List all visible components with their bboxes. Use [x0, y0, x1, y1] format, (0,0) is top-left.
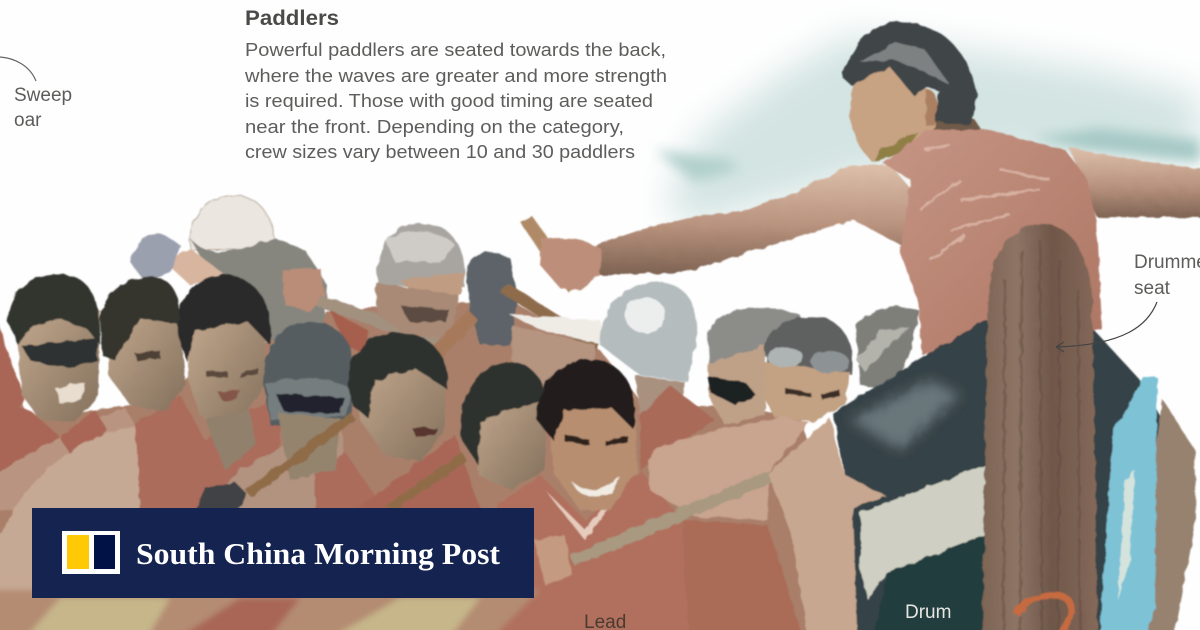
paddler with black cap	[264, 322, 353, 480]
drummer seat post	[982, 224, 1098, 630]
drumstick	[520, 216, 582, 292]
paddler with dark glasses	[707, 307, 800, 425]
white cap paddler behind	[510, 315, 605, 395]
back row of paddlers	[130, 195, 920, 470]
seat post grain	[1003, 240, 1080, 630]
oar shaft 2	[385, 452, 468, 510]
drummer left arm pointing	[590, 165, 912, 275]
drummer vest highlights	[920, 145, 1050, 260]
rust vest shoulders	[640, 385, 715, 470]
text block: paddlers description	[244, 39, 667, 162]
lead paddler with oar	[480, 360, 810, 630]
text block: paddlers description: where the waves are greater and more strength	[244, 65, 667, 86]
drummer fist	[540, 238, 602, 290]
label: drummer seat: seat	[1134, 278, 1171, 299]
drummer	[520, 22, 1200, 630]
label: sweep oar: Sweep	[14, 85, 72, 106]
label: drum: Drum	[905, 602, 951, 623]
drummer right leg	[1135, 400, 1196, 630]
grey cap paddler	[375, 224, 465, 338]
lead oar shaft	[570, 470, 774, 566]
grey glove and oar handle	[425, 253, 600, 360]
drummer right arm outstretched	[1069, 148, 1200, 218]
lower-right paddler vest	[682, 520, 810, 630]
label: sweep oar: oar	[14, 110, 42, 131]
heading: Paddlers: Paddlers	[245, 7, 339, 30]
orange numeral on post	[1017, 595, 1072, 630]
white helmet paddler	[165, 195, 327, 340]
gloved hand on oar	[195, 482, 248, 510]
label: sweep oar	[0, 57, 72, 131]
text block: paddlers description: is required. Those with good timing are seated	[245, 90, 653, 111]
forearm of lead paddler	[648, 417, 810, 520]
label: drummer seat	[1056, 252, 1200, 352]
paddler 1 with sunglasses	[8, 274, 100, 422]
paddler 3	[178, 275, 271, 470]
logo wordmark: South China Morning Post	[136, 536, 501, 571]
logo icon	[62, 531, 120, 574]
drummer bent leg	[768, 418, 887, 630]
drummer vest	[883, 130, 1102, 355]
text block: paddlers description: Powerful paddlers are seated towards the back,	[245, 39, 666, 60]
text block: paddlers description: near the front. Depending on the category,	[245, 116, 624, 137]
paddler 2	[100, 277, 185, 412]
crew body mass base	[0, 300, 870, 630]
light cap paddler	[600, 282, 697, 415]
rust vests and bodies	[0, 300, 480, 600]
boat edge and water	[0, 590, 540, 630]
blue flag board	[1098, 377, 1157, 630]
white towel	[860, 465, 985, 600]
grey glove hand	[130, 234, 180, 282]
lead paddler body	[480, 470, 690, 630]
fist and paddle shaft	[282, 268, 440, 355]
watercolor wash background	[655, 35, 1200, 225]
paddler 5	[461, 362, 546, 490]
drum	[868, 535, 985, 630]
text block: paddlers description: crew sizes vary between 10 and 30 paddlers	[245, 141, 635, 162]
lead paddler face	[537, 360, 637, 510]
rear right paddler	[856, 307, 920, 392]
paddler with goggles	[765, 316, 853, 422]
oar shaft 1	[245, 412, 356, 498]
hand at oar	[534, 535, 572, 585]
paddler 4	[348, 333, 448, 462]
logo banner: South China Morning Post	[32, 508, 534, 598]
drummer shorts	[833, 320, 1174, 630]
drummer neck and head	[842, 22, 985, 163]
front row of paddlers	[0, 274, 546, 600]
